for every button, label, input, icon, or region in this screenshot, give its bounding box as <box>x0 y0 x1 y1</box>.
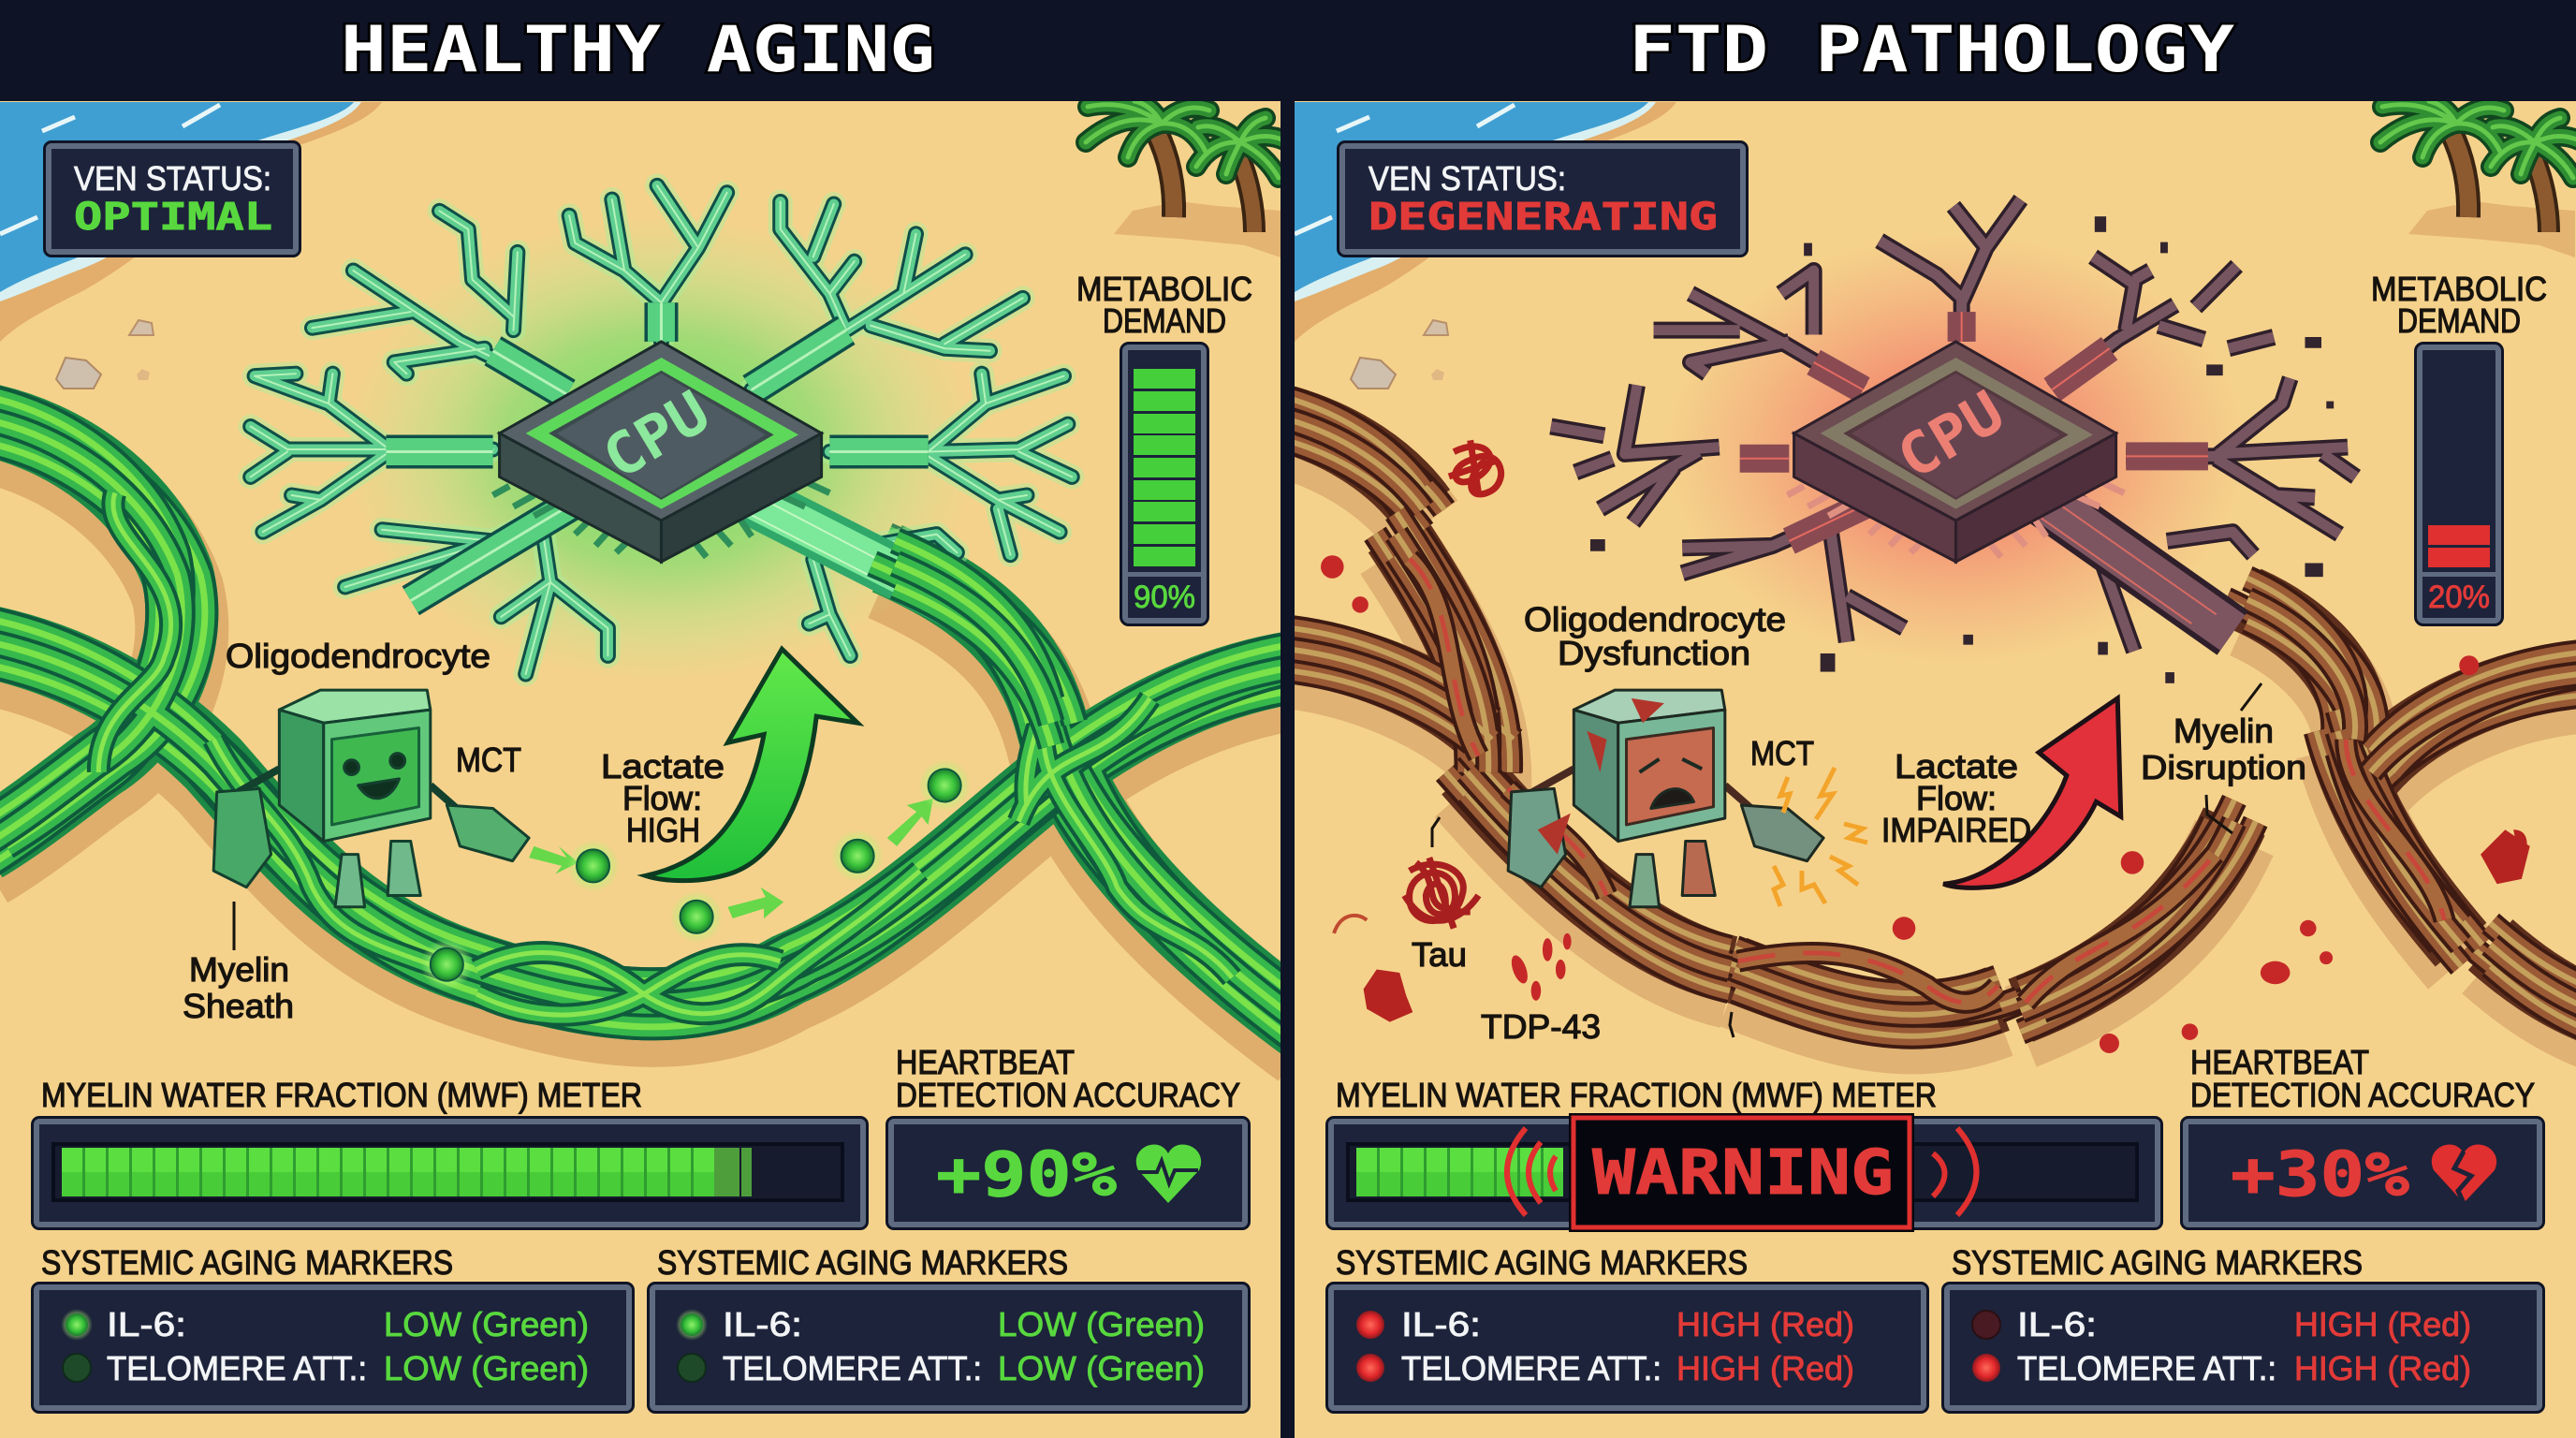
neuron glow <box>343 215 979 683</box>
central divider <box>1281 0 1295 1438</box>
metabolic demand label: DEMAND <box>1103 301 1226 340</box>
beach and palms right <box>1295 101 2576 389</box>
label lactate flow: HIGH <box>626 811 700 849</box>
CPU label right: CPU <box>1886 377 2015 492</box>
systemic markers panel D: HIGH (Red) <box>2294 1349 2471 1387</box>
heartbeat heading: HEARTBEAT <box>896 1043 1075 1081</box>
title: healthy aging: HEALTHY AGING <box>341 13 935 87</box>
lactate arrow high <box>646 649 857 881</box>
systemic markers panel D <box>1947 1287 2539 1408</box>
systemic markers panel A: TELOMERE ATT.: <box>107 1349 367 1387</box>
systemic markers panel D: IL-6: <box>2017 1305 2097 1343</box>
VEN status panel degenerating: VEN STATUS: <box>1368 159 1566 198</box>
systemic markers panel C: TELOMERE ATT.: <box>1401 1349 1661 1387</box>
label lactate flow: Lactate <box>601 747 724 785</box>
systemic markers panel C <box>1331 1287 1924 1408</box>
heartbeat accuracy panel right: +30% <box>2231 1138 2409 1211</box>
CPU chip <box>493 342 829 562</box>
systemic markers heading C: SYSTEMIC AGING MARKERS <box>1336 1243 1748 1282</box>
warning signal arcs <box>1507 1128 1977 1215</box>
robot oligodendrocyte <box>213 690 529 907</box>
MWF meter panel <box>37 1122 863 1225</box>
label myelin sheath: Myelin <box>189 950 289 989</box>
systemic markers panel B: IL-6: <box>723 1305 802 1343</box>
CPU chip damaged <box>1788 342 2124 562</box>
label lactate flow <box>601 747 724 849</box>
label lactate flow impaired: Lactate <box>1895 747 2018 785</box>
sand right background <box>1295 0 2576 1438</box>
heartbeat heading right <box>2190 1043 2535 1114</box>
systemic markers panel B: LOW (Green) <box>998 1305 1205 1343</box>
label myelin disruption: Disruption <box>2141 748 2306 786</box>
systemic markers panel B: TELOMERE ATT.: <box>723 1349 982 1387</box>
icon: broken heart <box>2432 1144 2496 1203</box>
MWF meter heading: MYELIN WATER FRACTION (MWF) METER <box>41 1076 642 1114</box>
broken axon <box>2031 500 2232 633</box>
systemic markers panel B: LOW (Green) <box>998 1349 1205 1387</box>
heartbeat heading right: DETECTION ACCURACY <box>2190 1076 2535 1114</box>
systemic markers panel D: TELOMERE ATT.: <box>2017 1349 2276 1387</box>
neuron red glow <box>1666 234 2247 665</box>
fractured myelin vines <box>1265 398 2576 1036</box>
heartbeat heading <box>896 1043 1240 1114</box>
VEN status panel: OPTIMAL <box>74 196 272 239</box>
metabolic demand gauge 20% <box>2420 347 2498 621</box>
label oligodendrocyte: Oligodendrocyte <box>226 637 490 675</box>
label lactate flow impaired: IMPAIRED <box>1881 811 2031 849</box>
systemic markers panel B <box>652 1287 1245 1408</box>
VEN status panel degenerating <box>1342 146 1743 252</box>
label oligodendrocyte dysfunction <box>1524 600 1786 672</box>
lactate particles <box>420 759 971 990</box>
systemic markers panel A <box>37 1287 629 1408</box>
systemic markers panel A: IL-6: <box>107 1305 186 1343</box>
label MCT: MCT <box>456 741 521 779</box>
beach and palms <box>0 101 1284 389</box>
degenerating dendrites <box>1551 199 2356 683</box>
VEN status panel degenerating: DEGENERATING <box>1368 196 1718 239</box>
label TDP-43: TDP-43 <box>1481 1007 1601 1046</box>
metabolic demand label right: METABOLIC <box>2371 270 2547 308</box>
metabolic demand gauge 20%: 20% <box>2428 580 2490 615</box>
label myelin disruption: Myelin <box>2174 712 2274 750</box>
metabolic demand label <box>1076 270 1252 340</box>
label tau: Tau <box>1412 935 1467 974</box>
heartbeat heading: DETECTION ACCURACY <box>896 1076 1240 1114</box>
metabolic demand label: METABOLIC <box>1076 270 1252 308</box>
MWF meter heading right: MYELIN WATER FRACTION (MWF) METER <box>1336 1076 1937 1114</box>
label lactate flow impaired <box>1881 747 2031 849</box>
lactate arrow impaired <box>1943 698 2121 888</box>
panel: FTD pathology <box>1295 101 2576 1414</box>
metabolic demand gauge 90% <box>1125 347 1204 621</box>
systemic markers panel C: IL-6: <box>1401 1305 1481 1343</box>
label TDP-43 <box>1481 1007 1734 1046</box>
vine over axon end <box>872 540 1075 746</box>
label lactate flow impaired: Flow: <box>1916 779 1997 817</box>
label oligodendrocyte dysfunction: Dysfunction <box>1558 634 1750 672</box>
header bar <box>0 0 2576 101</box>
metabolic demand label right: DEMAND <box>2397 301 2521 340</box>
warning box <box>1569 1113 1914 1232</box>
label myelin disruption <box>2141 683 2306 833</box>
systemic markers panel A: LOW (Green) <box>384 1305 589 1343</box>
myelin sheath vines <box>0 396 1329 1049</box>
heartbeat accuracy panel: +90% <box>936 1138 1117 1211</box>
systemic markers heading B: SYSTEMIC AGING MARKERS <box>657 1243 1068 1282</box>
robot dysfunctional <box>1508 690 1823 907</box>
panel: healthy aging <box>0 101 1329 1408</box>
warning box: WARNING <box>1592 1137 1894 1209</box>
sparks <box>1774 768 1867 906</box>
VEN status panel: VEN STATUS: <box>74 159 271 198</box>
icon: green heart with pulse <box>1136 1144 1201 1203</box>
systemic markers panel A: LOW (Green) <box>384 1349 589 1387</box>
MWF meter panel right <box>1331 1122 2158 1225</box>
heartbeat accuracy panel right <box>2186 1122 2539 1225</box>
heartbeat heading right: HEARTBEAT <box>2190 1043 2369 1081</box>
label myelin sheath <box>183 902 294 1025</box>
label oligodendrocyte dysfunction: Oligodendrocyte <box>1524 600 1786 638</box>
systemic markers panel D: HIGH (Red) <box>2294 1305 2471 1343</box>
systemic markers panel C: HIGH (Red) <box>1676 1349 1854 1387</box>
thick axon <box>735 495 970 609</box>
label myelin sheath: Sheath <box>183 987 294 1025</box>
systemic markers panel C: HIGH (Red) <box>1676 1305 1854 1343</box>
protein aggregates tau and TDP-43 <box>1321 440 2530 1053</box>
label MCT right: MCT <box>1750 734 1814 772</box>
label lactate flow: Flow: <box>622 779 702 817</box>
label tau <box>1412 817 1467 974</box>
debris fragments <box>1590 216 2334 683</box>
metabolic demand label right <box>2371 270 2547 340</box>
systemic markers heading D: SYSTEMIC AGING MARKERS <box>1952 1243 2363 1282</box>
heartbeat accuracy panel <box>891 1122 1245 1225</box>
title: FTD pathology: FTD PATHOLOGY <box>1629 13 2234 87</box>
metabolic demand gauge 90%: 90% <box>1134 580 1195 615</box>
VEN status panel <box>49 146 296 252</box>
systemic markers heading A: SYSTEMIC AGING MARKERS <box>41 1243 453 1282</box>
CPU label: CPU <box>592 377 721 492</box>
neuron dendrites <box>251 185 1072 674</box>
